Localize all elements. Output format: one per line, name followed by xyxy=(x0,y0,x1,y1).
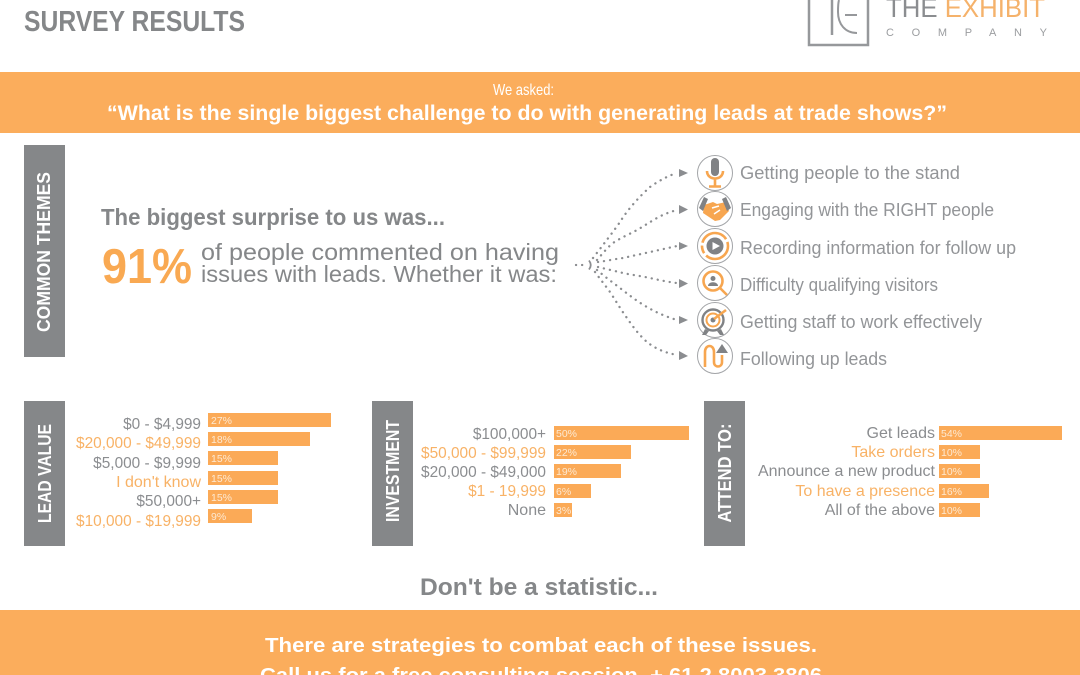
panel: investment: INVESTMENT xyxy=(383,420,403,522)
lead value bar chart: I don't know xyxy=(116,474,201,491)
attend to bar chart: All of the above xyxy=(825,502,935,519)
attend to bar chart xyxy=(758,425,1062,519)
statistic description: issues with leads. Whether it was: xyxy=(201,261,557,287)
statistic: 91%: 91% xyxy=(102,240,192,294)
lead value bar chart: 15% xyxy=(211,453,232,465)
list of lead issues: Difficulty qualifying visitors xyxy=(740,275,938,295)
attend to bar chart: Announce a new product xyxy=(758,463,936,480)
logo: COMPANY xyxy=(886,27,1048,39)
icon: follow-up path xyxy=(698,338,732,374)
attend to bar chart: Take orders xyxy=(851,444,935,461)
panel: common themes label: COMMON THEMES xyxy=(34,172,54,332)
lead value bar chart: 15% xyxy=(211,492,232,504)
investment bar chart: $1 - 19,999 xyxy=(468,483,546,500)
list of lead issues: Getting people to the stand xyxy=(740,163,960,183)
list of lead issues: Getting staff to work effectively xyxy=(740,312,982,332)
panel: attend to xyxy=(704,401,1062,546)
icon: handshake xyxy=(698,192,732,226)
icon: magnifier with person xyxy=(698,266,732,300)
investment bar chart: $100,000+ xyxy=(473,426,546,443)
investment bar chart: 22% xyxy=(556,447,577,459)
investment bar chart: 50% xyxy=(556,428,577,440)
logo xyxy=(809,0,1048,45)
panel: investment xyxy=(372,401,689,546)
icon: target xyxy=(698,302,732,338)
lead value bar chart: 27% xyxy=(211,415,232,427)
investment bar chart: 3% xyxy=(556,505,571,517)
statistic description: of people commented on having xyxy=(201,239,559,265)
surprise heading: The biggest surprise to us was... xyxy=(101,204,445,230)
panel: lead value xyxy=(24,401,331,546)
icon: play button xyxy=(698,228,732,264)
attend to bar chart: 16% xyxy=(941,486,962,498)
bottom banner xyxy=(0,610,1080,675)
bottom banner: There are strategies to combat each of these issues. xyxy=(265,635,817,657)
dotted arrows xyxy=(576,169,688,360)
slogan: Don't be a statistic... xyxy=(420,574,658,601)
attend to bar chart: 10% xyxy=(941,505,962,517)
top banner: “What is the single biggest challenge to do with generating leads at trade shows?” xyxy=(107,102,947,125)
lead value bar chart: $50,000+ xyxy=(136,493,201,510)
title: SURVEY RESULTS xyxy=(24,6,245,38)
lead value bar chart: 15% xyxy=(211,473,232,485)
list of lead issues: Following up leads xyxy=(740,349,887,369)
investment bar chart: 19% xyxy=(556,466,577,478)
attend to bar chart: To have a presence xyxy=(795,483,935,500)
attend to bar chart: 54% xyxy=(941,428,962,440)
top banner xyxy=(0,72,1080,133)
lead value bar chart: $5,000 - $9,999 xyxy=(93,455,201,472)
investment bar chart: $50,000 - $99,999 xyxy=(421,445,546,462)
lead value bar chart: 18% xyxy=(211,434,232,446)
lead value bar chart: $10,000 - $19,999 xyxy=(76,513,201,530)
panel: lead value: LEAD VALUE xyxy=(35,424,55,523)
statistic description xyxy=(201,239,559,287)
lead value bar chart: $0 - $4,999 xyxy=(123,416,201,433)
icon: microphone xyxy=(698,156,732,190)
panel: attend to: ATTEND TO: xyxy=(715,424,735,522)
list of lead issues: Engaging with the RIGHT people xyxy=(740,200,994,220)
panel: common themes label xyxy=(24,145,65,357)
lead value bar chart xyxy=(76,413,331,530)
attend to bar chart: Get leads xyxy=(867,425,935,442)
investment bar chart: 6% xyxy=(556,486,571,498)
lead value bar chart: 9% xyxy=(211,511,226,523)
list of lead issues: Recording information for follow up xyxy=(740,238,1016,258)
investment bar chart: $20,000 - $49,000 xyxy=(421,464,546,481)
top banner: We asked: xyxy=(493,82,554,99)
attend to bar chart: 10% xyxy=(941,466,962,478)
attend to bar chart: 10% xyxy=(941,447,962,459)
list of lead issues xyxy=(740,163,1016,369)
lead value bar chart: $20,000 - $49,999 xyxy=(76,435,201,452)
investment bar chart xyxy=(421,426,689,519)
investment bar chart: None xyxy=(508,502,546,519)
